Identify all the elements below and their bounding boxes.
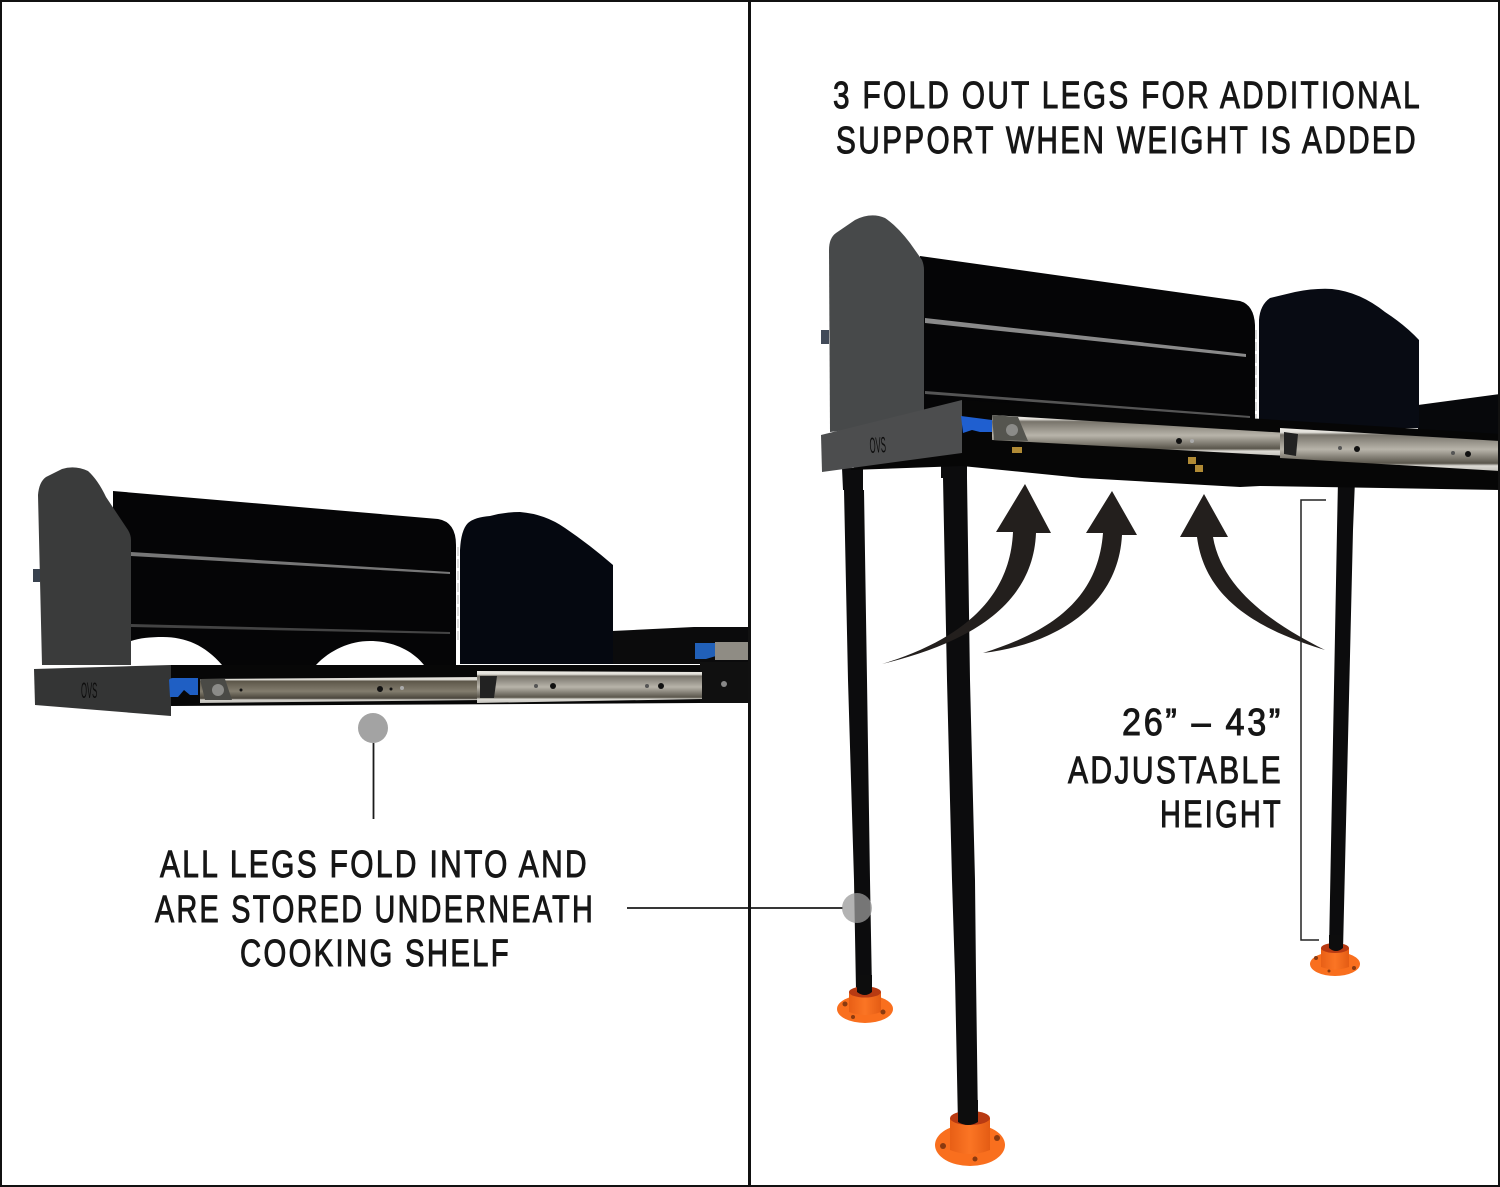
underside hardware	[1012, 447, 1203, 472]
text: stored under shelf: COOKING SHELF	[240, 933, 511, 975]
leg 3	[1329, 480, 1355, 950]
back wall stripes	[925, 318, 1250, 418]
slide rail inner	[200, 677, 482, 703]
text: adjustable height: ADJUSTABLE	[1068, 750, 1283, 792]
foot 1	[837, 975, 893, 1023]
arrow 2	[983, 491, 1137, 653]
folding hinge	[457, 547, 459, 640]
folding hinge	[1255, 330, 1257, 418]
logo on lip: OVS	[81, 679, 97, 703]
slide rail outer	[1280, 428, 1500, 471]
text: stored under shelf: ALL LEGS FOLD INTO AND	[160, 844, 589, 886]
leg 2	[941, 465, 978, 1125]
rear drawer section	[1418, 394, 1500, 440]
front lip	[34, 665, 171, 716]
drawer body	[171, 665, 700, 706]
front lip	[821, 400, 962, 472]
right side wall	[460, 512, 613, 664]
drawer body	[850, 400, 1500, 490]
right side wall	[1259, 289, 1419, 428]
side wall clip	[33, 569, 40, 582]
blue release tab	[961, 416, 992, 433]
callout: shelf marker	[358, 713, 388, 819]
text: fold out legs heading	[833, 75, 1422, 162]
callout: leg marker	[627, 893, 872, 923]
blue release tab	[169, 678, 198, 697]
left side wall	[829, 215, 924, 432]
leg 1	[842, 468, 872, 990]
text: adjustable height: 26” – 43”	[1122, 702, 1283, 744]
foot 2	[935, 1100, 1005, 1166]
side wall clip	[821, 330, 829, 344]
panel: stored position	[33, 467, 750, 975]
text: adjustable height: HEIGHT	[1160, 794, 1283, 836]
rail hardware	[992, 415, 1471, 457]
rail hardware	[200, 676, 664, 700]
height bracket	[1301, 500, 1326, 940]
arrow 3	[1180, 494, 1325, 650]
shelf photo: stored legs	[33, 467, 750, 716]
text: stored under shelf: ARE STORED UNDERNEATH	[155, 889, 595, 931]
shelf photo: deployed	[821, 215, 1500, 1125]
rear drawer section	[612, 627, 750, 703]
foot 3	[1310, 935, 1360, 976]
text: stored under shelf	[155, 844, 595, 975]
panel: deployed position	[627, 75, 1500, 1166]
back wall stripes	[131, 552, 450, 634]
back wall	[920, 256, 1255, 425]
left side wall	[38, 467, 131, 665]
arrow 1	[882, 484, 1051, 664]
rear rail bracket	[695, 642, 750, 703]
slide rail inner	[992, 415, 1288, 456]
text: adjustable height	[1068, 702, 1283, 836]
back wall	[113, 491, 456, 665]
logo on lip: OVS	[869, 433, 887, 458]
slide rail outer	[477, 671, 702, 703]
